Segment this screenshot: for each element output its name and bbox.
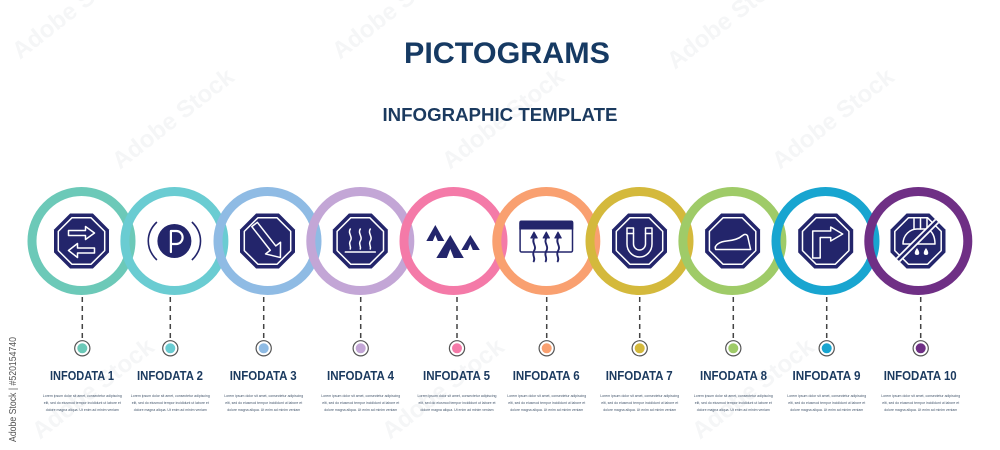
description 8: Lorem ipsum dolor sit amet, consectetur adipiscing (694, 393, 773, 398)
icon: slope shape sign (705, 214, 760, 268)
ring 3 (218, 192, 317, 290)
description 7: elit, sed do eiusmod tempor incididunt ut labore et (601, 400, 679, 405)
description 10 (881, 393, 960, 412)
description 1 (43, 393, 122, 412)
faint watermark: Adobe Stock (437, 63, 570, 175)
stock id side text: Adobe Stock | #520154740 (7, 337, 19, 442)
connector 7 (639, 297, 641, 339)
faint watermark: Adobe Stock (107, 63, 240, 175)
description 8: dolore magna aliqua. Ut enim ad minim veniam (697, 407, 770, 412)
connector 4 (360, 297, 362, 339)
description 9 (787, 393, 866, 412)
description 3: elit, sed do eiusmod tempor incididunt ut labore et (225, 400, 303, 405)
description 5: elit, sed do eiusmod tempor incididunt ut labore et (418, 400, 496, 405)
connector 9 (826, 297, 828, 339)
connector 10 (920, 297, 922, 339)
icon: magnet sign (612, 214, 667, 268)
item: infodata 8 (683, 192, 782, 412)
icon: tents (426, 225, 480, 258)
ring 5 (404, 192, 503, 290)
description 2: Lorem ipsum dolor sit amet, consectetur adipiscing (131, 393, 210, 398)
dot 5 (449, 341, 465, 356)
description 8: elit, sed do eiusmod tempor incididunt ut labore et (695, 400, 773, 405)
dot 2 (163, 341, 178, 356)
description 9: dolore magna aliqua. Ut enim ad minim veniam (790, 407, 863, 412)
icon: heat waves sign (333, 214, 388, 268)
description 5: Lorem ipsum dolor sit amet, consectetur adipiscing (418, 393, 496, 398)
description 10: elit, sed do eiusmod tempor incididunt ut labore et (882, 400, 960, 405)
icon: turn right sign (798, 214, 853, 268)
description 9: elit, sed do eiusmod tempor incididunt ut labore et (788, 400, 866, 405)
item: infodata 1 (32, 192, 131, 412)
item: infodata 7 (590, 192, 689, 412)
connector 8 (732, 297, 734, 339)
dot 4 (353, 341, 368, 356)
ring 10 (869, 192, 968, 290)
description 4 (321, 393, 400, 412)
item: infodata 3 (218, 192, 317, 412)
description 4: elit, sed do eiusmod tempor incididunt ut labore et (322, 400, 400, 405)
label 6: INFODATA 6 (513, 368, 580, 383)
dot 8 (726, 341, 741, 356)
description 10: Lorem ipsum dolor sit amet, consectetur adipiscing (881, 393, 960, 398)
description 3: dolore magna aliqua. Ut enim ad minim veniam (227, 407, 300, 412)
description 3: Lorem ipsum dolor sit amet, consectetur adipiscing (224, 393, 303, 398)
icon: diagonal arrow sign (240, 214, 295, 268)
item: infodata 5 (404, 192, 503, 412)
description 6: elit, sed do eiusmod tempor incididunt ut labore et (508, 400, 586, 405)
description 6 (507, 393, 586, 412)
item: infodata 2 (125, 192, 224, 412)
label 7: INFODATA 7 (606, 368, 673, 383)
item: infodata 6 (497, 192, 596, 412)
description 2: dolore magna aliqua. Ut enim ad minim veniam (134, 407, 207, 412)
description 3 (224, 393, 303, 412)
item: infodata 10 (869, 192, 968, 412)
label 4: INFODATA 4 (327, 368, 395, 383)
description 10: dolore magna aliqua. Ut enim ad minim veniam (884, 407, 957, 412)
dot 7 (632, 341, 647, 356)
icon: parking brake (148, 222, 201, 260)
label 10: INFODATA 10 (884, 368, 957, 383)
connector 2 (169, 297, 171, 339)
label 5: INFODATA 5 (423, 368, 490, 383)
description 1: Lorem ipsum dolor sit amet, consectetur adipiscing (43, 393, 122, 398)
label 3: INFODATA 3 (230, 368, 297, 383)
description 6: dolore magna aliqua. Ut enim ad minim veniam (510, 407, 583, 412)
faint watermark: Adobe Stock (767, 63, 900, 175)
connector 3 (263, 297, 265, 339)
description 9: Lorem ipsum dolor sit amet, consectetur adipiscing (787, 393, 866, 398)
label 8: INFODATA 8 (700, 368, 767, 383)
icon: two-way arrows sign (54, 214, 109, 268)
icon: rear window defroster (519, 220, 573, 262)
connector 1 (81, 297, 83, 339)
connector 5 (456, 297, 458, 339)
description 4: dolore magna aliqua. Ut enim ad minim veniam (324, 407, 397, 412)
description 8 (694, 393, 773, 412)
ring 8 (683, 192, 782, 290)
ring 1 (32, 192, 131, 290)
ring 4 (311, 192, 410, 290)
faint watermark: Adobe Stock (687, 333, 820, 445)
description 4: Lorem ipsum dolor sit amet, consectetur adipiscing (321, 393, 400, 398)
icon: no washing sign (890, 214, 946, 268)
description 2 (131, 393, 210, 412)
description 1: elit, sed do eiusmod tempor incididunt ut labore et (44, 400, 122, 405)
description 5 (418, 393, 496, 412)
description 7 (600, 393, 679, 412)
description 7: Lorem ipsum dolor sit amet, consectetur adipiscing (600, 393, 679, 398)
faint watermark: Adobe Stock (27, 333, 160, 445)
dot 9 (819, 341, 834, 356)
description 6: Lorem ipsum dolor sit amet, consectetur adipiscing (507, 393, 586, 398)
label 9: INFODATA 9 (792, 368, 860, 383)
dot 10 (913, 341, 928, 356)
ring 7 (590, 192, 689, 290)
dot 3 (256, 341, 271, 356)
faint watermark: Adobe Stock (377, 333, 510, 445)
item: infodata 9 (776, 192, 875, 412)
description 1: dolore magna aliqua. Ut enim ad minim veniam (46, 407, 119, 412)
description 2: elit, sed do eiusmod tempor incididunt ut labore et (132, 400, 210, 405)
connector 6 (546, 297, 548, 339)
label 1: INFODATA 1 (50, 368, 114, 383)
item: infodata 4 (311, 192, 410, 412)
description 7: dolore magna aliqua. Ut enim ad minim veniam (603, 407, 676, 412)
subtitle: INFOGRAPHIC TEMPLATE (382, 105, 618, 125)
dot 6 (539, 341, 554, 356)
ring 9 (776, 192, 875, 290)
description 5: dolore magna aliqua. Ut enim ad minim veniam (420, 407, 494, 412)
ring 6 (497, 192, 596, 290)
title: PICTOGRAMS (404, 37, 610, 70)
ring 2 (125, 192, 224, 290)
dot 1 (75, 341, 90, 356)
label 2: INFODATA 2 (137, 368, 203, 383)
